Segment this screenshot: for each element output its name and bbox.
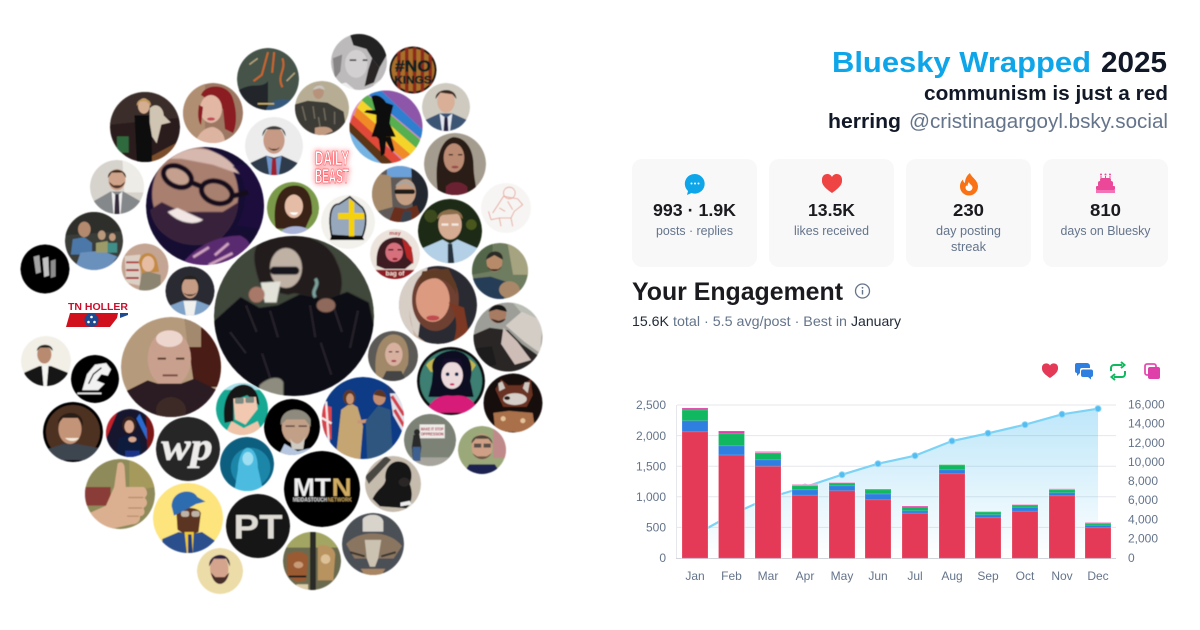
- chart grid and axes: [676, 405, 1116, 558]
- icon: heart: [822, 174, 842, 193]
- avatar: bearded man with tree behind: [472, 243, 528, 299]
- month labels: Mar: [758, 569, 778, 583]
- avatar: MeidasTouch Network logo: MEIDASTOUCH: [293, 498, 327, 504]
- avatar: cartoon man with blue cap on yellow: [153, 483, 223, 553]
- stacked bars: [682, 408, 1111, 558]
- panel: day posting streak stat card: [906, 159, 1031, 267]
- title: Bluesky Wrapped 2025: Bluesky Wrapped: [832, 47, 1091, 79]
- left axis labels: 1,000: [636, 490, 666, 504]
- month labels: Apr: [796, 569, 814, 583]
- text: display name and handle: communism is just a red: [924, 83, 1168, 105]
- avatar: smiling woman on green background: [267, 182, 319, 234]
- right axis labels: 16,000: [1128, 398, 1165, 412]
- avatar: woman with long dark hair: [424, 133, 486, 195]
- bar: Jan: [682, 408, 708, 558]
- right axis labels: 4,000: [1128, 512, 1158, 526]
- text: engagement summary: [632, 313, 901, 329]
- avatar: line sketch on pale background: [481, 183, 531, 233]
- avatar: dogs behind a fence: [283, 532, 341, 590]
- avatar: black curly dog: [365, 456, 421, 512]
- panel: days on Bluesky stat card: [1043, 159, 1168, 267]
- avatar: No Kings logo: #NO: [395, 59, 431, 76]
- right axis labels: 8,000: [1128, 474, 1158, 488]
- avatar: two people shaking hands with flags: [322, 377, 404, 459]
- bar: Jun: [865, 489, 891, 558]
- logo: TN Holler: TN HOLLER: [68, 301, 128, 313]
- right axis labels: 2,000: [1128, 532, 1158, 546]
- legend: engagement type icons: [1042, 362, 1160, 380]
- icon: info: [856, 284, 870, 298]
- bar: Apr: [792, 484, 818, 558]
- bar: Dec: [1085, 522, 1111, 558]
- month labels: Jan: [685, 569, 705, 583]
- avatar: smiling man on brown background: [43, 402, 103, 462]
- avatar: PT logo: PT: [233, 508, 283, 546]
- avatar: person next to protest sign: [404, 414, 456, 466]
- cumulative area: [695, 409, 1098, 558]
- panel: day posting streak stat card: 230: [953, 200, 984, 220]
- avatar: bearded man in grey suit: [90, 160, 144, 214]
- avatar: black circle W logo: [20, 244, 70, 294]
- left axis labels: 2,000: [636, 429, 666, 443]
- heading: Your Engagement: Your Engagement: [632, 278, 844, 306]
- avatar: red-haired woman: [183, 83, 243, 143]
- right axis labels: [1128, 398, 1165, 565]
- panel: days on Bluesky stat card: days on Bluesky: [1060, 223, 1151, 238]
- text: display name and handle: [828, 83, 1168, 133]
- bar: Nov: [1049, 489, 1075, 558]
- panel: days on Bluesky stat card: 810: [1090, 200, 1121, 220]
- cumulative line: [695, 406, 1101, 535]
- avatar: person next to protest sign: OPPRESSION: [421, 432, 443, 437]
- text: display name and handle: @cristinagargoyl.bsky.social: [909, 111, 1168, 133]
- avatar: young man in suit: [422, 83, 470, 131]
- icon: flame: [960, 173, 978, 196]
- avatar: bishop mitre with gold cross: [321, 195, 375, 249]
- panel: likes received stat card: 13.5K: [808, 200, 855, 220]
- avatar: young woman with long hair: [368, 331, 418, 381]
- left axis labels: 1,500: [636, 460, 666, 474]
- avatar: ship emblem black and white: [71, 355, 119, 403]
- avatar: man holding shaggy dog: [295, 81, 349, 135]
- left axis labels: 2,500: [636, 398, 666, 412]
- logo: Daily Beast neon text: [315, 148, 349, 188]
- bar: Mar: [755, 451, 781, 558]
- logo: Daily Beast neon text: BEAST: [315, 166, 349, 188]
- avatar: pin-up woman with text: may: [389, 231, 402, 237]
- avatar: taxidermy creature: [342, 513, 404, 575]
- avatar: MeidasTouch Network logo: [284, 451, 360, 527]
- avatar: man in black blazer on white: [21, 336, 71, 386]
- month labels: Dec: [1087, 569, 1109, 583]
- avatar: man with blonde hair, blue shirt and tie: [418, 199, 482, 263]
- right axis labels: 6,000: [1128, 493, 1158, 507]
- chart: monthly engagement stacked bars with cumulative line: [636, 398, 1165, 583]
- avatar: red panda: [484, 374, 542, 432]
- month labels: Nov: [1051, 569, 1073, 583]
- month labels: Jun: [868, 569, 888, 583]
- avatar: older man with glasses: [264, 399, 320, 455]
- bar: Sep: [975, 511, 1001, 558]
- panel: day posting streak stat card: day posting: [936, 223, 1001, 238]
- avatar: PT logo: [226, 494, 290, 558]
- bar: Jul: [902, 506, 928, 558]
- right axis labels: 12,000: [1128, 436, 1165, 450]
- avatar: MeidasTouch Network logo: MT: [293, 474, 331, 502]
- avatar: thumbs up: [85, 459, 155, 529]
- bar: Feb: [718, 431, 744, 558]
- left axis labels: 500: [646, 520, 666, 534]
- text: engagement summary: total · 5.5 avg/post · Best in: [673, 313, 847, 329]
- left axis labels: [636, 398, 666, 565]
- avatar: person next to protest sign: MAKE IT STOP: [421, 426, 444, 431]
- avatar: TV host woman clasped hands: [106, 409, 154, 457]
- month labels: Sep: [977, 569, 999, 583]
- avatar: No Kings logo: KINGS: [394, 74, 432, 86]
- avatar: pin-up woman with text: bag of: [386, 271, 405, 278]
- avatar: man in dark suit with red tie: [245, 117, 303, 175]
- panel: posts and replies stat card: 993 · 1.9K: [653, 200, 736, 220]
- month labels: Oct: [1016, 569, 1035, 583]
- month labels: May: [831, 569, 853, 583]
- avatar: man with sunglasses on street: [372, 166, 428, 222]
- avatar: blue hooded figure: [220, 437, 274, 491]
- right axis labels: 0: [1128, 551, 1135, 565]
- panel: posts and replies stat card: [632, 159, 757, 267]
- bar: Aug: [939, 464, 965, 558]
- avatar: smiling man with glasses: [458, 426, 506, 474]
- avatar: No Kings logo: [390, 47, 436, 93]
- avatar: woman in black fur coat with cup: [214, 235, 374, 396]
- panel: likes received stat card: [769, 159, 894, 267]
- avatar: man in white shirt on dark background: [165, 266, 215, 316]
- icon: likes heart: [1042, 363, 1058, 378]
- avatar: black and white portrait: [331, 34, 387, 90]
- bar: Oct: [1012, 504, 1038, 558]
- avatar: MeidasTouch Network logo: NETWORK: [328, 498, 352, 504]
- logo: Daily Beast neon text: DAILY: [315, 148, 349, 170]
- icon: replies chat: [1075, 363, 1093, 380]
- panel: likes received stat card: likes received: [794, 223, 869, 238]
- avatar: man lying with blanket: [474, 302, 542, 372]
- left axis labels: 0: [659, 551, 666, 565]
- avatar: woman holding small dog: [110, 92, 180, 162]
- avatar: Washington Post logo: wp: [161, 425, 213, 469]
- right axis labels: 14,000: [1128, 416, 1165, 430]
- title: Bluesky Wrapped 2025: 2025: [1101, 47, 1167, 79]
- avatar: blonde woman with flag: [122, 244, 168, 290]
- panel: day posting streak stat card: streak: [951, 239, 986, 254]
- avatar: MeidasTouch Network logo: N: [332, 474, 352, 502]
- logo: TN Holler: [66, 301, 128, 327]
- avatar: man in blue shirt with friends in cockpit: [65, 212, 123, 270]
- avatar: woman selfie in warm light: [399, 266, 477, 344]
- panel: avatar bubble cluster: [20, 34, 543, 594]
- avatar: bald man with dark shirt: [121, 317, 221, 424]
- month labels: [685, 569, 1109, 583]
- month labels: Aug: [941, 569, 963, 583]
- icon: cake: [1096, 174, 1115, 193]
- avatar: cartoon with long hair and sunglasses: [216, 383, 268, 435]
- icon: quotes copy squares: [1145, 364, 1160, 379]
- icon: chat bubble: [685, 174, 705, 195]
- avatar: bearded man on pale yellow: [197, 548, 243, 594]
- icon: reposts arrows: [1111, 362, 1125, 380]
- bar: May: [829, 482, 855, 558]
- avatar: rainbow stripes with silhouette woman: [349, 90, 427, 166]
- text: engagement summary: 15.6K: [632, 313, 670, 329]
- panel: posts and replies stat card: posts · replies: [656, 223, 733, 238]
- month labels: Jul: [907, 569, 923, 583]
- avatar: painted girl in pink top: [417, 347, 485, 415]
- avatar: smiling man with black glasses: [146, 147, 264, 265]
- text: display name and handle: herring: [828, 111, 901, 133]
- avatar: Washington Post logo: [156, 417, 220, 481]
- avatar: dragon artwork: [237, 48, 299, 110]
- text: engagement summary: January: [851, 313, 901, 329]
- avatar: pin-up woman with text: [370, 229, 420, 279]
- right axis labels: 10,000: [1128, 455, 1165, 469]
- month labels: Feb: [721, 569, 742, 583]
